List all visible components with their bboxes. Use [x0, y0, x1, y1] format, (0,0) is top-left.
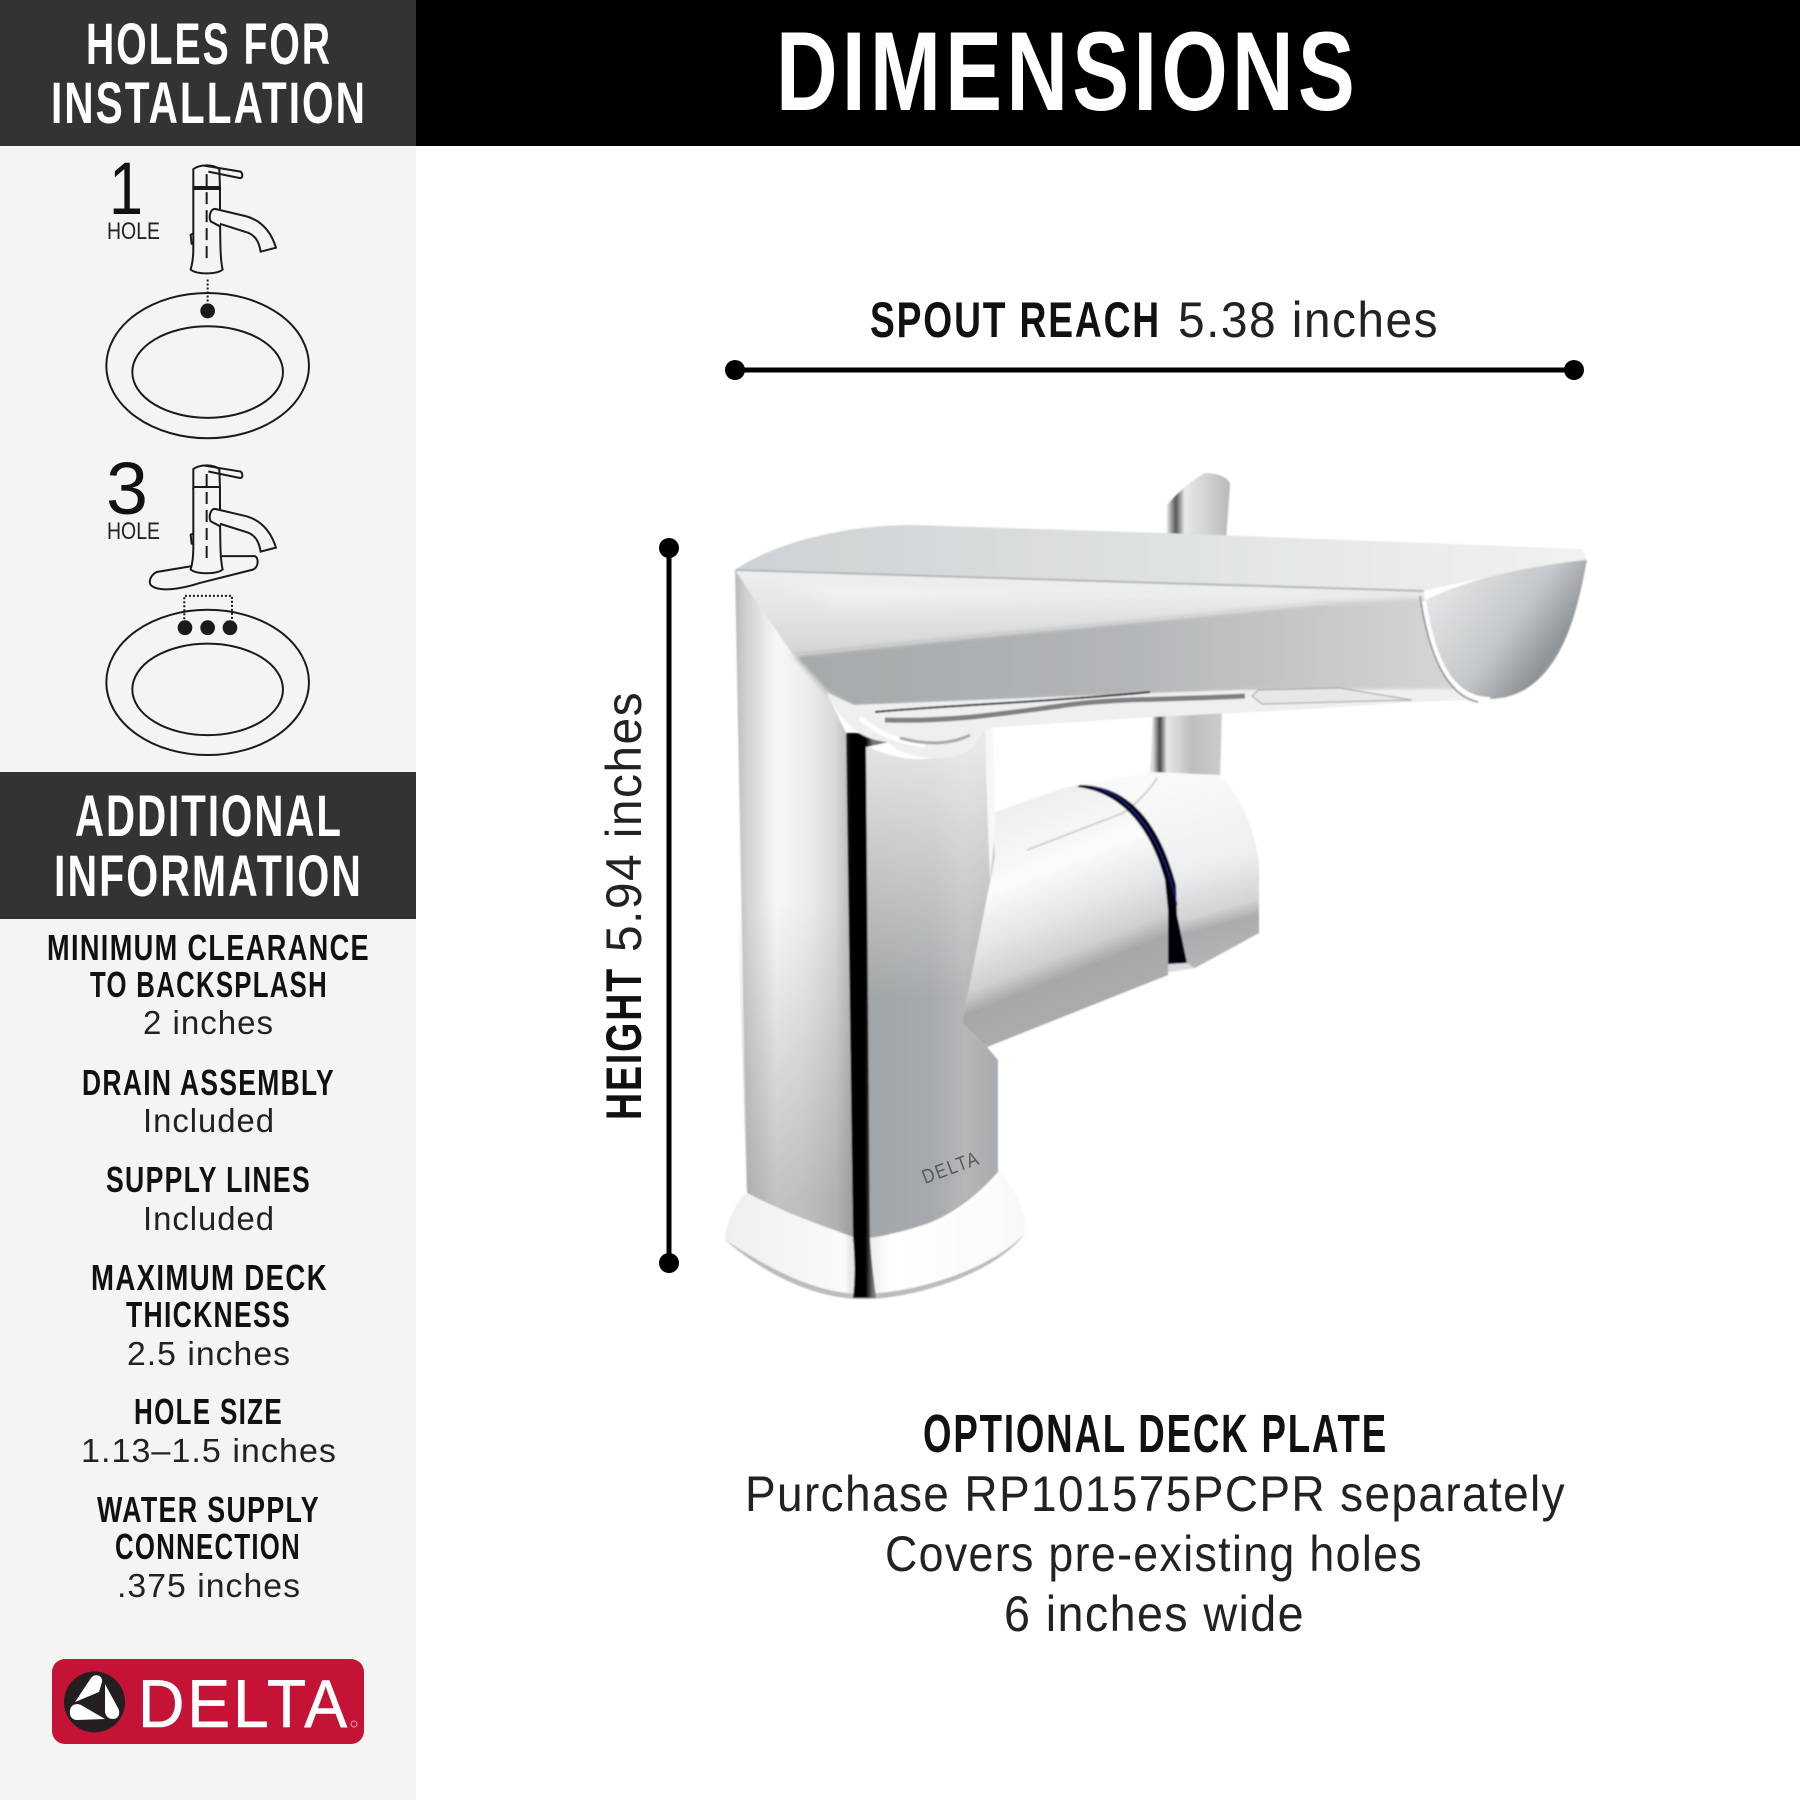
spec: supply lines: SUPPLY LINES — [106, 1159, 311, 1200]
spec: supply lines — [106, 1159, 311, 1237]
spec: maximum deck thickness — [91, 1257, 328, 1372]
3 hole label: 3 — [106, 447, 148, 530]
header: holes for installation: INSTALLATION — [51, 71, 367, 136]
logo: delta — [52, 1659, 364, 1744]
spec: minimum clearance to backsplash — [47, 927, 370, 1041]
header: additional information: ADDITIONAL — [75, 784, 343, 849]
dimension label: spout reach — [870, 292, 1439, 348]
spec: drain assembly: DRAIN ASSEMBLY — [82, 1062, 335, 1103]
spout side bright — [735, 570, 1424, 655]
lever stem — [1150, 710, 1222, 780]
dimension line: spout reach — [725, 360, 1584, 380]
3 hole label: HOLE — [107, 518, 160, 545]
dimension line: height — [659, 538, 679, 1273]
spec: hole size: 1.13–1.5 inches — [81, 1432, 337, 1469]
body left face — [735, 570, 853, 1237]
spec: minimum clearance to backsplash: MINIMUM CLEARANCE — [47, 927, 370, 968]
spec: minimum clearance to backsplash: 2 inches — [143, 1004, 274, 1041]
header: additional information — [0, 772, 416, 919]
icon: three hole faucet, deck plate and sink — [106, 465, 309, 755]
spec: supply lines: Included — [143, 1200, 275, 1237]
text block: optional deck plate: Covers pre-existing holes — [885, 1526, 1423, 1582]
spout opening — [1424, 560, 1587, 699]
text block: optional deck plate — [745, 1404, 1566, 1642]
spec: water supply connection: CONNECTION — [115, 1526, 301, 1567]
handle left section — [962, 785, 1168, 1047]
back of lever — [1167, 473, 1230, 540]
text block: optional deck plate: OPTIONAL DECK PLATE — [923, 1404, 1388, 1464]
spec: maximum deck thickness: THICKNESS — [126, 1294, 291, 1335]
handle right section — [1063, 772, 1259, 972]
3 hole label — [106, 447, 160, 545]
title bar: dimensions — [416, 0, 1800, 146]
spec: hole size: HOLE SIZE — [134, 1391, 283, 1432]
1 hole label: HOLE — [107, 218, 160, 245]
product: chrome faucet — [725, 473, 1587, 1299]
dark strip — [846, 733, 888, 1298]
panel: left sidebar background — [0, 0, 416, 1800]
icon: one hole faucet and sink — [106, 165, 309, 438]
spec: water supply connection: .375 inches — [117, 1567, 301, 1604]
spec: drain assembly: Included — [143, 1102, 275, 1139]
dimension label: height — [596, 691, 652, 1120]
text block: optional deck plate: Purchase RP101575PCPR separately — [745, 1466, 1566, 1522]
dimension label: height: HEIGHT — [596, 967, 652, 1120]
spec: minimum clearance to backsplash: TO BACKSPLASH — [90, 964, 328, 1005]
spec: water supply connection — [97, 1489, 320, 1604]
base — [725, 1173, 1025, 1299]
header: holes for installation — [0, 0, 416, 146]
header: additional information: INFORMATION — [54, 844, 363, 909]
text block: optional deck plate: 6 inches wide — [1004, 1586, 1305, 1642]
spec: water supply connection: WATER SUPPLY — [97, 1489, 320, 1530]
title bar: dimensions: DIMENSIONS — [776, 9, 1359, 134]
spec: hole size — [81, 1391, 337, 1469]
spout top — [735, 525, 1587, 591]
dimension label: spout reach: SPOUT REACH — [870, 292, 1161, 348]
spec: maximum deck thickness: 2.5 inches — [127, 1335, 291, 1372]
1 hole label — [107, 147, 160, 245]
column — [865, 727, 998, 1238]
dimension label: height: 5.94 inches — [596, 691, 652, 952]
1 hole label: 1 — [109, 147, 143, 230]
dimension label: spout reach: 5.38 inches — [1178, 292, 1439, 348]
spout side grey band — [793, 598, 1460, 708]
spec: drain assembly — [82, 1062, 335, 1139]
spec: maximum deck thickness: MAXIMUM DECK — [91, 1257, 328, 1298]
faucet logo: DELTA — [919, 1148, 983, 1189]
logo: delta: DELTA — [138, 1666, 350, 1742]
header: holes for installation: HOLES FOR — [86, 12, 332, 77]
handle seam — [1077, 785, 1187, 965]
spout underside — [827, 690, 1490, 758]
